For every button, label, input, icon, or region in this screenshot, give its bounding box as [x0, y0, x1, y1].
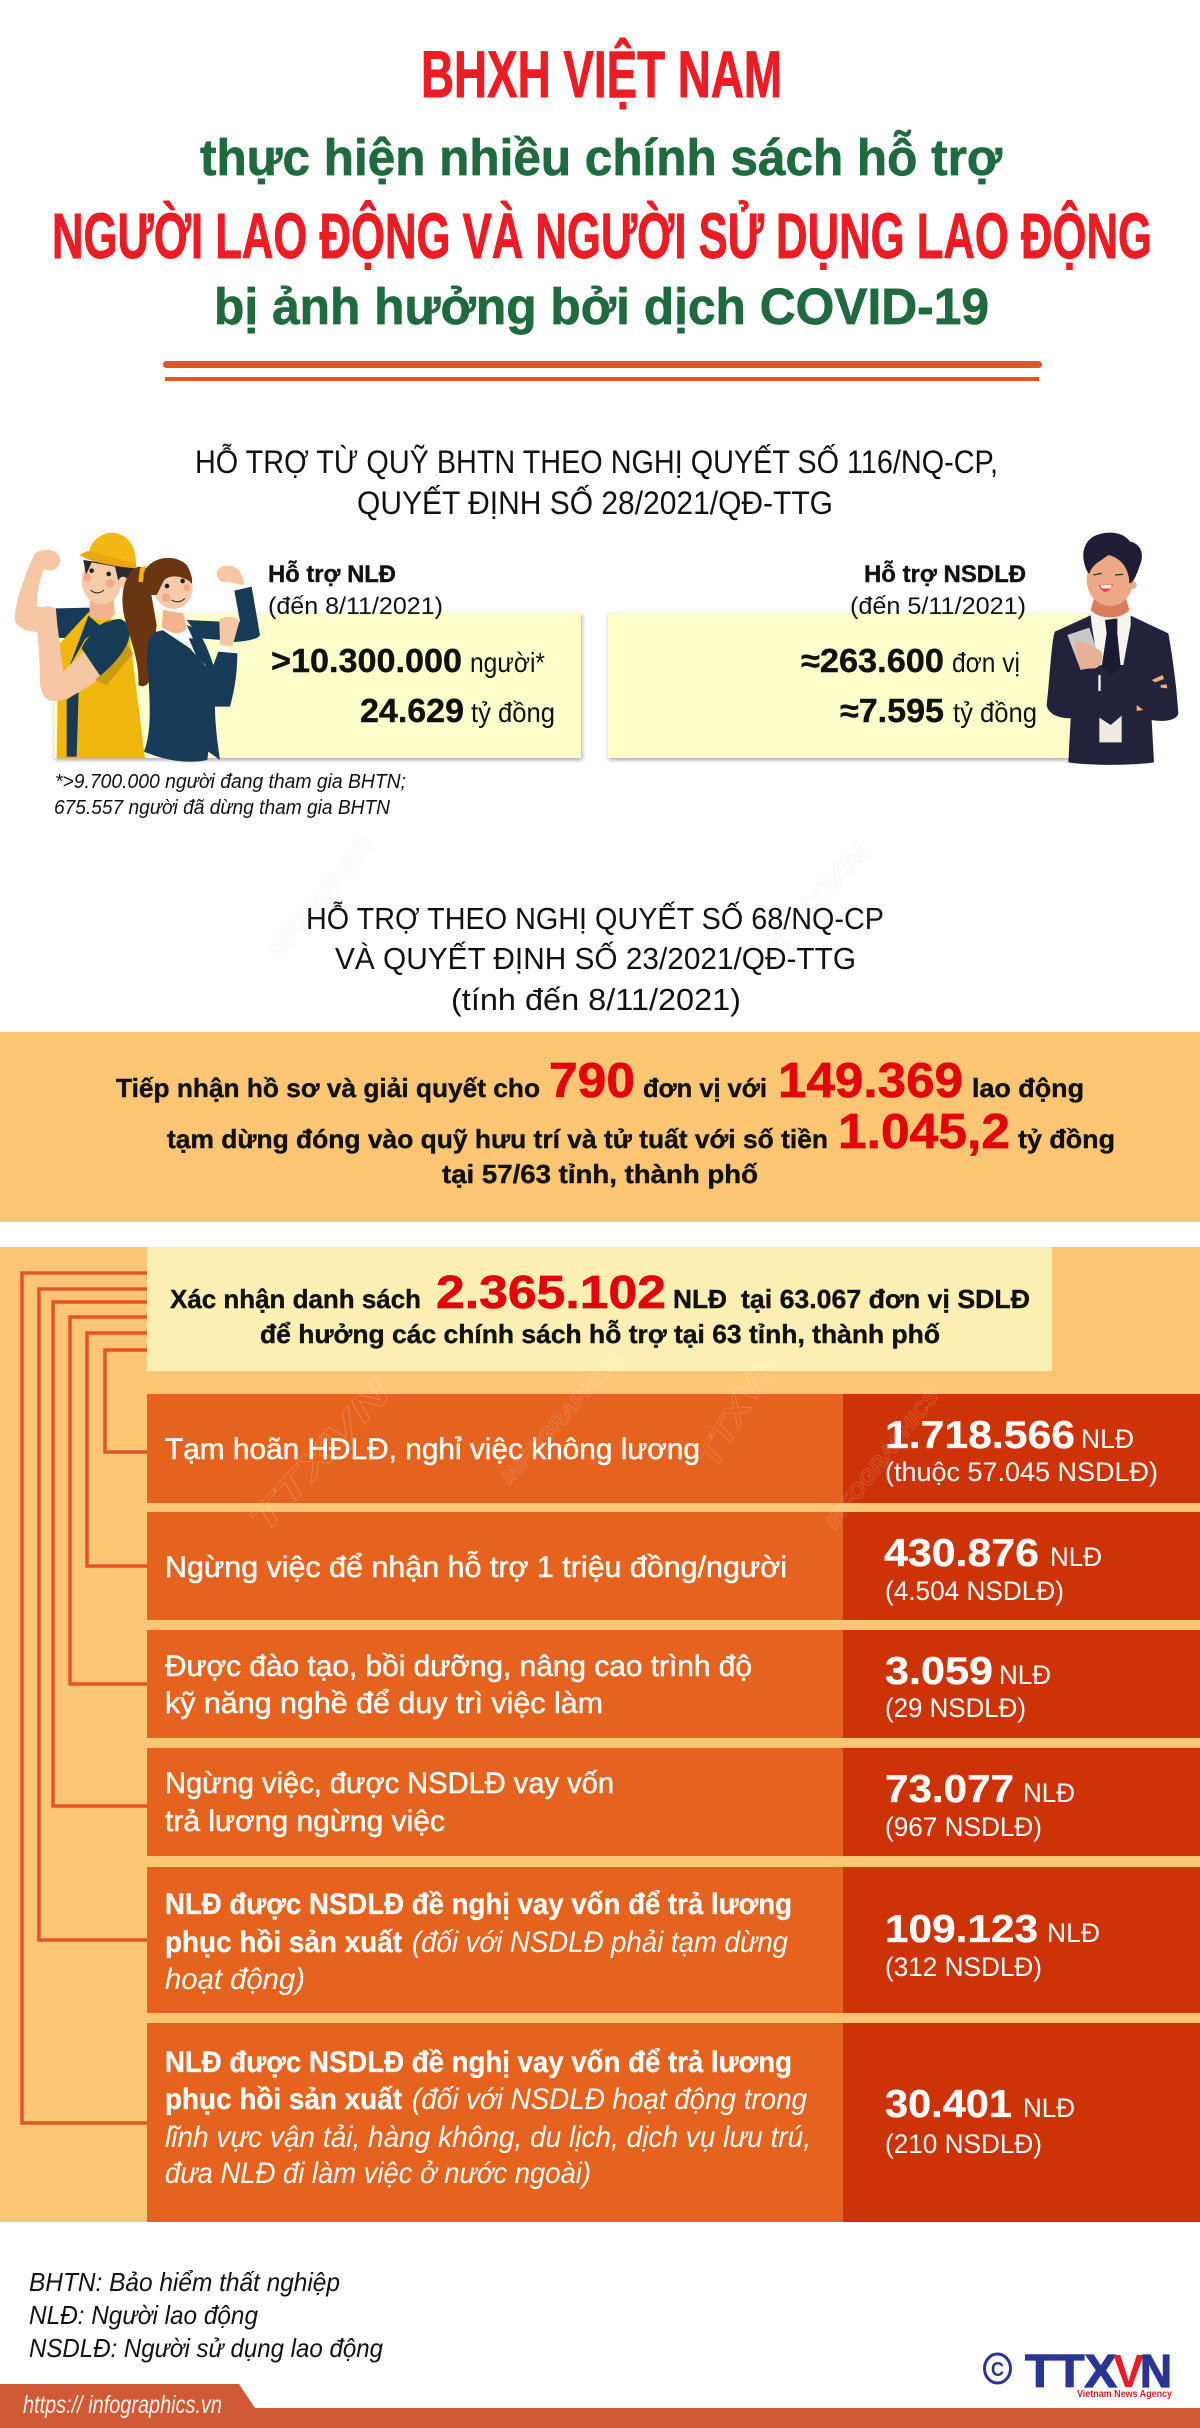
- unit: units: đơn vị: [952, 647, 1020, 678]
- row 6: recovery wage loans, transport and tourism: (210 NSDLĐ): [885, 2129, 1042, 2159]
- date: worker support: (đến 8/11/2021): [268, 593, 443, 620]
- legend: abbreviations: [29, 2267, 383, 2363]
- footnote: [54, 771, 406, 819]
- row 6: recovery wage loans, transport and tourism: đưa NLĐ đi làm việc ở nước ngoài): [165, 2157, 591, 2190]
- unit: people: người*: [470, 647, 545, 678]
- logo: TTXVN: TTX: [1025, 2345, 1117, 2397]
- row 3: training: Được đào tạo, bồi dưỡng, nâng cao trình độ: [165, 1650, 752, 1683]
- icon: businessman holding phone: [1047, 533, 1178, 765]
- row 1: contract suspension: [147, 1394, 1200, 1503]
- heading: unemployment insurance fund support: [195, 444, 998, 521]
- unit: billion dong employer: tỷ đồng: [953, 697, 1037, 728]
- icon: worker and office employee flexing: [15, 533, 260, 762]
- watermarks: INFOGRAPHICS: [264, 832, 381, 964]
- row 3: training: NLĐ: [999, 1660, 1051, 1690]
- row 4: stoppage wage loans: 73.077: [885, 1768, 1014, 1811]
- watermarks: TTXVN: [240, 1371, 399, 1540]
- row 5: recovery wage loans, suspended employers: NLĐ được NSDLĐ đề nghị vay vốn để trả lương: [165, 1888, 792, 1921]
- panel: pension suspension: lao động: [972, 1073, 1084, 1103]
- panel: employer support: [608, 560, 1088, 758]
- row 6: recovery wage loans, transport and tourism: [147, 2023, 1200, 2222]
- connector lines: [22, 1273, 147, 2123]
- legend: abbreviations: BHTN: Bảo hiểm thất nghiệp: [29, 2267, 340, 2297]
- row 4: stoppage wage loans: Ngừng việc, được NSDLĐ vay vốn: [165, 1767, 614, 1800]
- heading: unemployment insurance fund support: HỖ TRỢ TỪ QUỸ BHTN THEO NGHỊ QUYẾT SỐ 116/NQ-CP,: [195, 444, 998, 480]
- callout: confirmed list: NLĐ: [673, 1284, 727, 1314]
- legend: abbreviations: NLĐ: Người lao động: [29, 2300, 259, 2330]
- number: amount: 1.045,2: [838, 1105, 1010, 1159]
- row 2: work stoppage support: NLĐ: [1050, 1542, 1102, 1572]
- row 5: recovery wage loans, suspended employers: NLĐ: [1047, 1918, 1100, 1948]
- date: employer support: (đến 5/11/2021): [850, 593, 1026, 620]
- row 5: recovery wage loans, suspended employers: phục hồi sản xuất: [165, 1926, 402, 1959]
- footnote: 675.557 người đã dừng tham gia BHTN: [54, 797, 391, 819]
- logo: TTXVN: [984, 2345, 1172, 2400]
- row 4: stoppage wage loans: (967 NSDLĐ): [885, 1812, 1042, 1842]
- panel: confirmed worker lists background: [0, 1247, 1200, 2222]
- row 5: recovery wage loans, suspended employers: (đối với NSDLĐ phải tạm dừng: [412, 1926, 788, 1959]
- row 1: contract suspension: NLĐ: [1081, 1424, 1134, 1454]
- row 5: recovery wage loans, suspended employers: hoạt động): [165, 1963, 305, 1996]
- row 6: recovery wage loans, transport and tourism: NLĐ: [1023, 2093, 1075, 2123]
- footnote: *>9.700.000 người đang tham gia BHTN;: [55, 771, 406, 793]
- row 6: recovery wage loans, transport and tourism: NLĐ được NSDLĐ đề nghị vay vốn để trả lương: [165, 2046, 792, 2079]
- row 4: stoppage wage loans: trả lương ngừng việc: [165, 1805, 445, 1838]
- logo: TTXVN: N: [1140, 2345, 1172, 2397]
- row 6: recovery wage loans, transport and tourism: (đối với NSDLĐ hoạt động trong: [412, 2083, 807, 2116]
- label: employer support: Hỗ trợ NSDLĐ: [864, 560, 1026, 588]
- row 2: work stoppage support: Ngừng việc để nhận hỗ trợ 1 triệu đồng/người: [165, 1551, 787, 1584]
- row 1: contract suspension: Tạm hoãn HĐLĐ, nghỉ việc không lương: [165, 1433, 700, 1466]
- label: worker support: Hỗ trợ NLĐ: [268, 560, 396, 588]
- panel: pension suspension: [0, 1032, 1200, 1222]
- watermarks: TTXVN: [690, 1342, 787, 1474]
- row 1: contract suspension: (thuộc 57.045 NSDLĐ): [885, 1457, 1158, 1487]
- panel: worker support: [54, 560, 581, 758]
- callout: confirmed list: tại 63.067 đơn vị SDLĐ: [741, 1284, 1030, 1314]
- heading: resolution 68 support: HỖ TRỢ THEO NGHỊ QUYẾT SỐ 68/NQ-CP: [306, 900, 884, 936]
- row 3: training: 3.059: [885, 1650, 993, 1693]
- panel: pension suspension: đơn vị với: [643, 1073, 767, 1103]
- unit: billion dong: tỷ đồng: [471, 697, 555, 728]
- watermarks: INFOGRAPHICS: [822, 1385, 944, 1533]
- heading: unemployment insurance fund support: QUYẾT ĐỊNH SỐ 28/2021/QĐ-TTG: [357, 485, 833, 521]
- value: employers count: ≈263.600: [801, 642, 944, 679]
- value: employer amount: ≈7.595: [840, 692, 944, 729]
- panel: pension suspension: tạm dừng đóng vào quỹ hưu trí và tử tuất với số tiền: [167, 1124, 828, 1154]
- source url: https:// infographics.vn: [23, 2391, 222, 2419]
- row 1: contract suspension: 1.718.566: [885, 1414, 1075, 1457]
- heading: resolution 68 support: VÀ QUYẾT ĐỊNH SỐ 23/2021/QĐ-TTG: [335, 940, 856, 976]
- logo: TTXVN: V: [1113, 2345, 1144, 2397]
- row 3: training: (29 NSDLĐ): [885, 1693, 1026, 1723]
- row 5: recovery wage loans, suspended employers: 109.123: [885, 1908, 1038, 1951]
- row 2: work stoppage support: 430.876: [884, 1532, 1039, 1575]
- panel: pension suspension: Tiếp nhận hồ sơ và giải quyết cho: [116, 1073, 540, 1103]
- legend: abbreviations: NSDLĐ: Người sử dụng lao động: [29, 2333, 383, 2363]
- title line: COVID-19: bị ảnh hưởng bởi dịch COVID-19: [214, 278, 989, 335]
- heading: resolution 68 support: [306, 900, 884, 1017]
- title block: [52, 37, 1152, 335]
- callout: confirmed list: Xác nhận danh sách: [170, 1284, 421, 1314]
- row 2: work stoppage support: (4.504 NSDLĐ): [885, 1576, 1064, 1606]
- panel: pension suspension: tại 57/63 tỉnh, thành phố: [442, 1159, 758, 1189]
- row 3: training: [147, 1630, 1200, 1738]
- number: units: 790: [549, 1054, 635, 1108]
- title line: intro: thực hiện nhiều chính sách hỗ trợ: [200, 129, 1003, 186]
- watermarks: INFOGRAPHICS: [497, 1347, 628, 1488]
- row 6: recovery wage loans, transport and tourism: lĩnh vực vận tải, hàng không, du lịch, dịch vụ lưu trú,: [165, 2121, 811, 2154]
- title line: BHXH Việt Nam: BHXH VIỆT NAM: [421, 37, 782, 111]
- callout: confirmed list: [147, 1247, 1052, 1371]
- watermarks: [240, 832, 944, 1540]
- row 4: stoppage wage loans: [147, 1748, 1200, 1856]
- footer bar: [0, 2384, 1200, 2428]
- row 5: recovery wage loans, suspended employers: [147, 1867, 1200, 2013]
- icon: copyright: C: [991, 2359, 1004, 2381]
- heading: resolution 68 support: (tính đến 8/11/2021): [451, 982, 741, 1017]
- value: worker amount: 24.629: [360, 692, 464, 729]
- row 5: recovery wage loans, suspended employers: (312 NSDLĐ): [885, 1952, 1042, 1982]
- callout: confirmed list: để hưởng các chính sách hỗ trợ tại 63 tỉnh, thành phố: [260, 1319, 940, 1349]
- row 6: recovery wage loans, transport and tourism: 30.401: [885, 2083, 1012, 2126]
- logo: TTXVN: Vietnam News Agency: [1077, 2388, 1172, 2400]
- icon: copyright: [984, 2354, 1010, 2383]
- number: workers: 149.369: [778, 1054, 963, 1108]
- row 3: training: kỹ năng nghề để duy trì việc làm: [165, 1687, 603, 1720]
- number: confirmed workers: 2.365.102: [436, 1266, 666, 1318]
- watermarks: TTXVN: [761, 836, 875, 964]
- row 4: stoppage wage loans: NLĐ: [1023, 1778, 1075, 1808]
- row 6: recovery wage loans, transport and tourism: phục hồi sản xuất: [165, 2083, 402, 2116]
- panel: pension suspension: tỷ đồng: [1018, 1124, 1115, 1154]
- value: workers count: >10.300.000: [271, 642, 462, 679]
- row 2: work stoppage support: [147, 1512, 1200, 1620]
